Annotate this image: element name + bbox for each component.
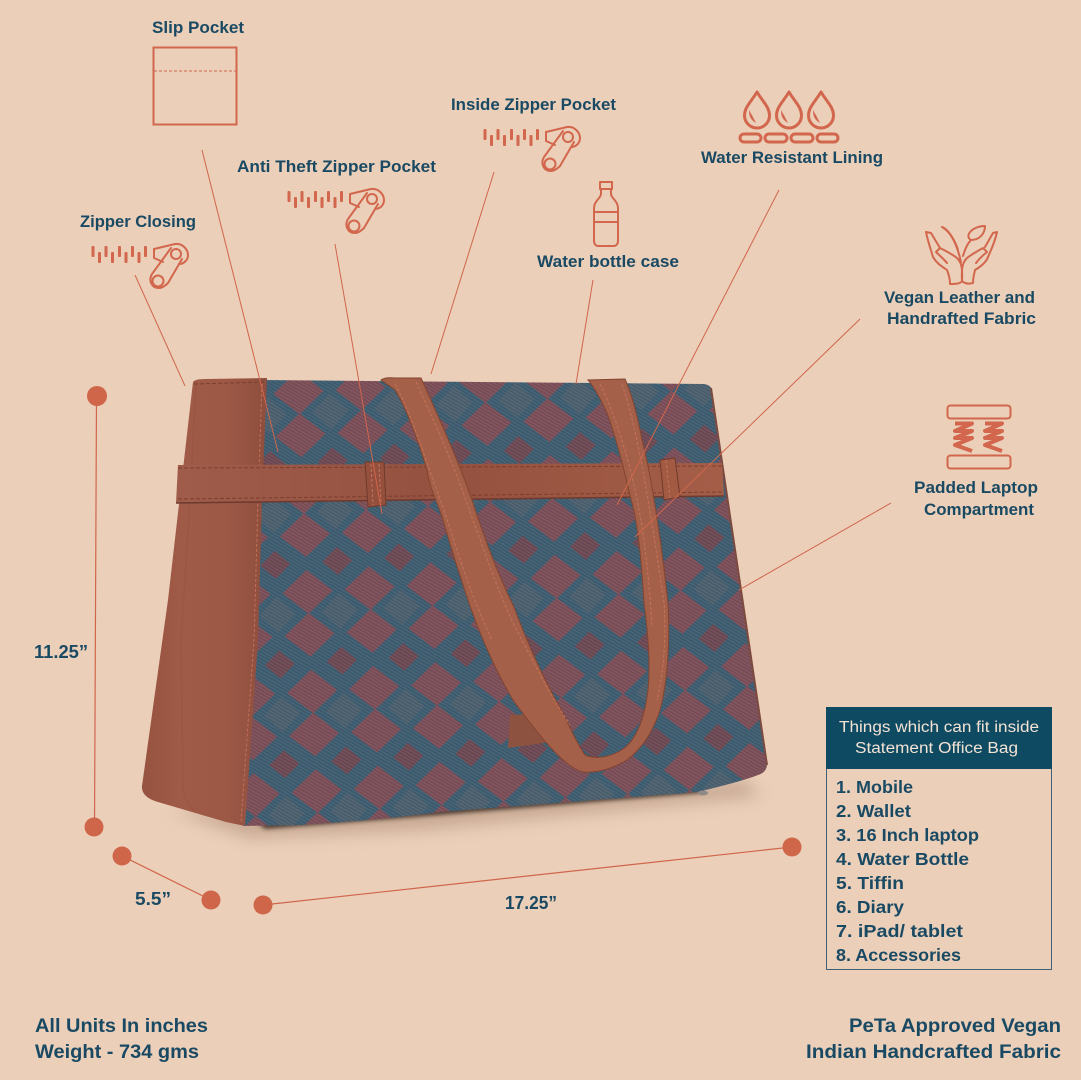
dimension label: depth: 5.5” — [135, 889, 171, 909]
belt loops — [365, 458, 680, 507]
icon: water drops and lining — [740, 92, 838, 142]
bag illustration — [142, 378, 767, 838]
panel: things which can fit inside — [826, 707, 1052, 970]
dimension: height — [84, 386, 107, 836]
icon: padded spring — [948, 406, 1010, 468]
list of items: 7. iPad/ tablet — [836, 921, 963, 941]
footer: vegan and handcrafted note: PeTa Approved Vegan — [849, 1015, 1061, 1037]
label: Vegan Leather and Handrafted Fabric: Handrafted Fabric — [887, 309, 1036, 328]
icon: slip pocket — [154, 48, 236, 124]
dimension label: height: 11.25” — [34, 642, 88, 662]
leader lines — [135, 150, 891, 590]
bag shadow — [170, 780, 760, 838]
label: Zipper Closing: Zipper Closing — [80, 212, 196, 231]
footer: vegan and handcrafted note — [806, 1015, 1061, 1063]
belt — [176, 463, 724, 503]
list of items: 1. Mobile — [836, 777, 913, 797]
fabric front panel — [243, 380, 767, 826]
icon: water bottle — [594, 182, 618, 246]
icon: inside zipper — [484, 127, 580, 171]
panel header — [826, 707, 1052, 769]
leather side panel — [142, 378, 267, 826]
dimension label: width: 17.25” — [505, 893, 557, 913]
label: Padded Laptop Compartment: Padded Laptop — [914, 478, 1038, 497]
list of items: 3. 16 Inch laptop — [836, 825, 979, 845]
footer: units and weight — [35, 1015, 208, 1063]
brand tag — [508, 713, 565, 748]
label: Vegan Leather and Handrafted Fabric — [884, 288, 1036, 328]
label: Anti Theft Zipper Pocket: Anti Theft Zipper Pocket — [237, 157, 436, 176]
list of items — [836, 777, 979, 965]
footer: units and weight: All Units In inches — [35, 1015, 208, 1037]
icon: closing zipper — [92, 244, 188, 288]
dimension: width — [254, 838, 802, 914]
label: Water Resistant Lining: Water Resistant Lining — [701, 148, 883, 167]
metal foot — [698, 790, 708, 796]
list of items: 5. Tiffin — [836, 873, 904, 893]
panel header: Things which can fit inside — [839, 719, 1039, 736]
panel header: Statement Office Bag — [855, 740, 1018, 757]
list of items: 2. Wallet — [836, 801, 911, 821]
shoulder strap — [381, 378, 669, 772]
list of items: 6. Diary — [836, 897, 904, 917]
label: Padded Laptop Compartment — [914, 478, 1038, 519]
label: Vegan Leather and Handrafted Fabric: Vegan Leather and — [884, 288, 1035, 307]
label: Padded Laptop Compartment: Compartment — [924, 500, 1034, 519]
dimension: depth — [112, 846, 220, 910]
footer: units and weight: Weight - 734 gms — [35, 1041, 199, 1063]
footer: vegan and handcrafted note: Indian Handcrafted Fabric — [806, 1041, 1061, 1063]
icon: hands holding plant — [926, 226, 997, 284]
list of items: 4. Water Bottle — [836, 849, 969, 869]
label: Inside Zipper Pocket: Inside Zipper Pocket — [451, 95, 616, 114]
list of items: 8. Accessories — [836, 945, 961, 965]
icon: anti theft zipper — [288, 189, 384, 233]
title label: Slip Pocket: Slip Pocket — [152, 18, 244, 37]
label: Water bottle case: Water bottle case — [537, 252, 679, 271]
